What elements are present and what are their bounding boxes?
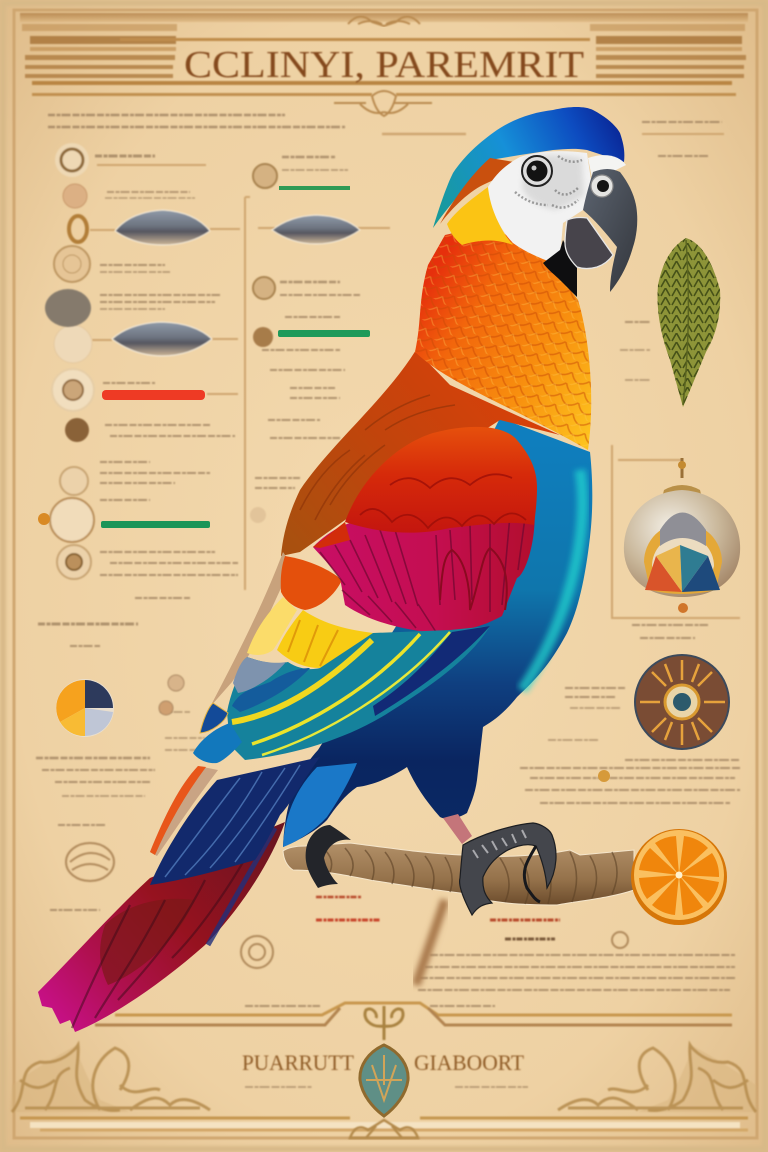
- dark tail coverts: [150, 757, 320, 885]
- tan wing shaft: [210, 552, 292, 707]
- wing yellow feathers: [247, 597, 373, 668]
- orange slice: [631, 829, 727, 925]
- sub-header ornament: [334, 91, 432, 116]
- white face: [488, 151, 626, 263]
- wing crimson feathers: [313, 500, 535, 634]
- fern leaf: [658, 238, 720, 407]
- beak: [565, 169, 637, 292]
- small amber dot: [598, 770, 610, 782]
- left pie chart: [56, 675, 184, 737]
- footer crest: [365, 1006, 403, 1040]
- bottom crest: [350, 1120, 418, 1138]
- footer rules: [20, 1003, 748, 1130]
- footer flourish right: [558, 1045, 758, 1112]
- header ornament bands: [20, 13, 748, 96]
- gauge disk: [635, 655, 729, 749]
- small left emblems: [66, 843, 628, 968]
- black throat patch: [543, 240, 577, 297]
- left text columns: [36, 115, 360, 910]
- coloured bars: [101, 186, 370, 528]
- tail feathers: [38, 822, 285, 1032]
- legs and talons: [306, 814, 556, 915]
- yellow throat: [447, 187, 513, 245]
- title: CCLINYI, PAREMRIT: [184, 44, 584, 86]
- red captions under branch: [316, 897, 560, 939]
- footer title right: GIABOORT: [414, 1050, 525, 1075]
- icon: orange dot: [38, 513, 50, 525]
- wing orange primaries: [281, 556, 342, 610]
- belly and rear: [283, 418, 592, 847]
- eye: [522, 156, 552, 186]
- divider rules: [90, 134, 740, 618]
- footer title left: PUARRUTT: [242, 1050, 355, 1075]
- wing teal and blue flight feathers: [193, 626, 490, 763]
- chest plumage: [415, 225, 591, 450]
- orange tail edge: [150, 766, 218, 856]
- branch perch: [283, 843, 634, 905]
- icon: grey stone: [45, 289, 91, 327]
- red cheek stripe: [440, 158, 520, 224]
- footer medallion: [360, 1045, 408, 1116]
- lens shapes: [112, 210, 360, 356]
- back plumage: [281, 350, 560, 556]
- glass sphere chart: [624, 458, 740, 613]
- right text columns: [245, 122, 740, 1087]
- left callout icons: [38, 143, 277, 579]
- footer flourish left: [10, 1045, 210, 1112]
- head cap: [433, 107, 624, 228]
- header crest ornament: [348, 16, 420, 26]
- wing red coverts: [313, 427, 537, 548]
- parrot: [38, 107, 637, 1032]
- perch stub shadow: [416, 900, 445, 985]
